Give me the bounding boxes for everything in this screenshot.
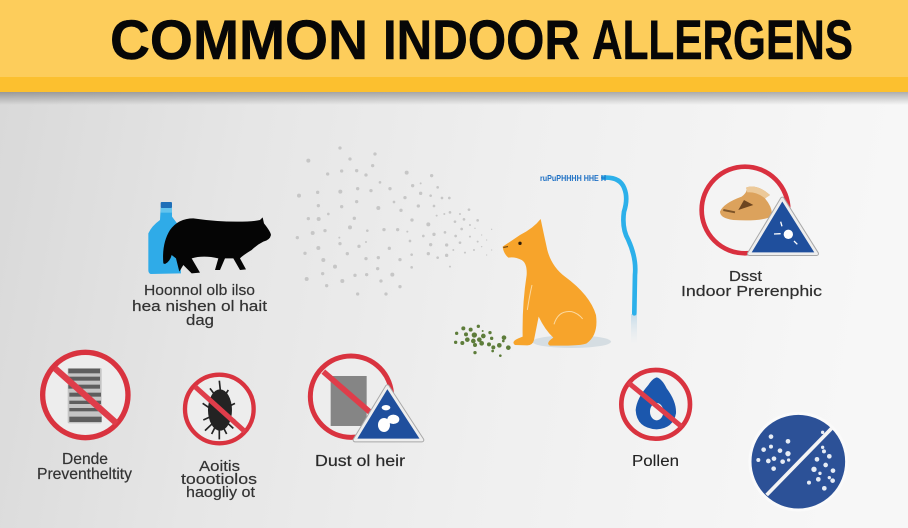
text: pet caption: hea nishen ol hait [132, 298, 268, 315]
text: pet caption: Hoonnol olb ilso [144, 282, 255, 299]
icon: prohibited blue drop [621, 370, 690, 439]
text: mite caption: haogliy ot [186, 484, 256, 501]
text: dust caption [681, 268, 823, 300]
text: mite caption [181, 458, 257, 501]
text: dust caption: Indoor Prerenphic [681, 283, 823, 300]
text: dust or hair caption: Dust ol heir [315, 453, 406, 470]
text: pollen caption: Pollen [632, 453, 679, 470]
panel: dust or hair [310, 356, 422, 470]
icon: cyan tube [603, 178, 635, 313]
text: dense caption: Preventheltity [37, 466, 132, 483]
title: COMMON [110, 8, 368, 71]
panel: pollen [621, 370, 690, 470]
text: pet caption: dag [186, 312, 214, 329]
particle cloud [296, 146, 492, 296]
panel: pet dander, bottle and black cat [132, 202, 271, 329]
text: pet caption [132, 282, 268, 329]
pollen specks [454, 325, 511, 357]
icon: prohibited gray block [310, 356, 392, 437]
text: mite caption: toootiolos [181, 471, 257, 488]
panel: orange dog with pollen [454, 219, 611, 357]
text: mite caption: Aoitis [199, 458, 240, 475]
icon: prohibited stack [43, 352, 128, 438]
icon: black cat silhouette [163, 217, 271, 273]
icon: blue bottle [148, 202, 181, 274]
panel: dust shoe warning [681, 167, 823, 300]
icon: blue warning triangle [749, 199, 817, 254]
icon: blue circle with pollen stars [750, 413, 847, 510]
panel: dense prevention [37, 352, 132, 483]
text: dense caption: Dende [62, 451, 108, 468]
text: tube label: ruPuPHHHH HHE H [540, 173, 606, 183]
panel: blue tube with label [540, 173, 637, 344]
title [110, 8, 853, 71]
text: dense caption [37, 451, 132, 483]
title: INDOOR [383, 8, 580, 71]
tube fade [631, 314, 637, 344]
icon: prohibited spiky mite [185, 375, 254, 443]
text: dust caption: Dsst [729, 268, 763, 285]
dog shadow [532, 335, 611, 348]
icon: blue triangle with dust [355, 387, 422, 440]
header banner [0, 0, 908, 92]
icon: red ring with dust mound [702, 167, 788, 253]
panel: spiky mite [181, 375, 257, 501]
icon: orange dog [503, 219, 596, 346]
